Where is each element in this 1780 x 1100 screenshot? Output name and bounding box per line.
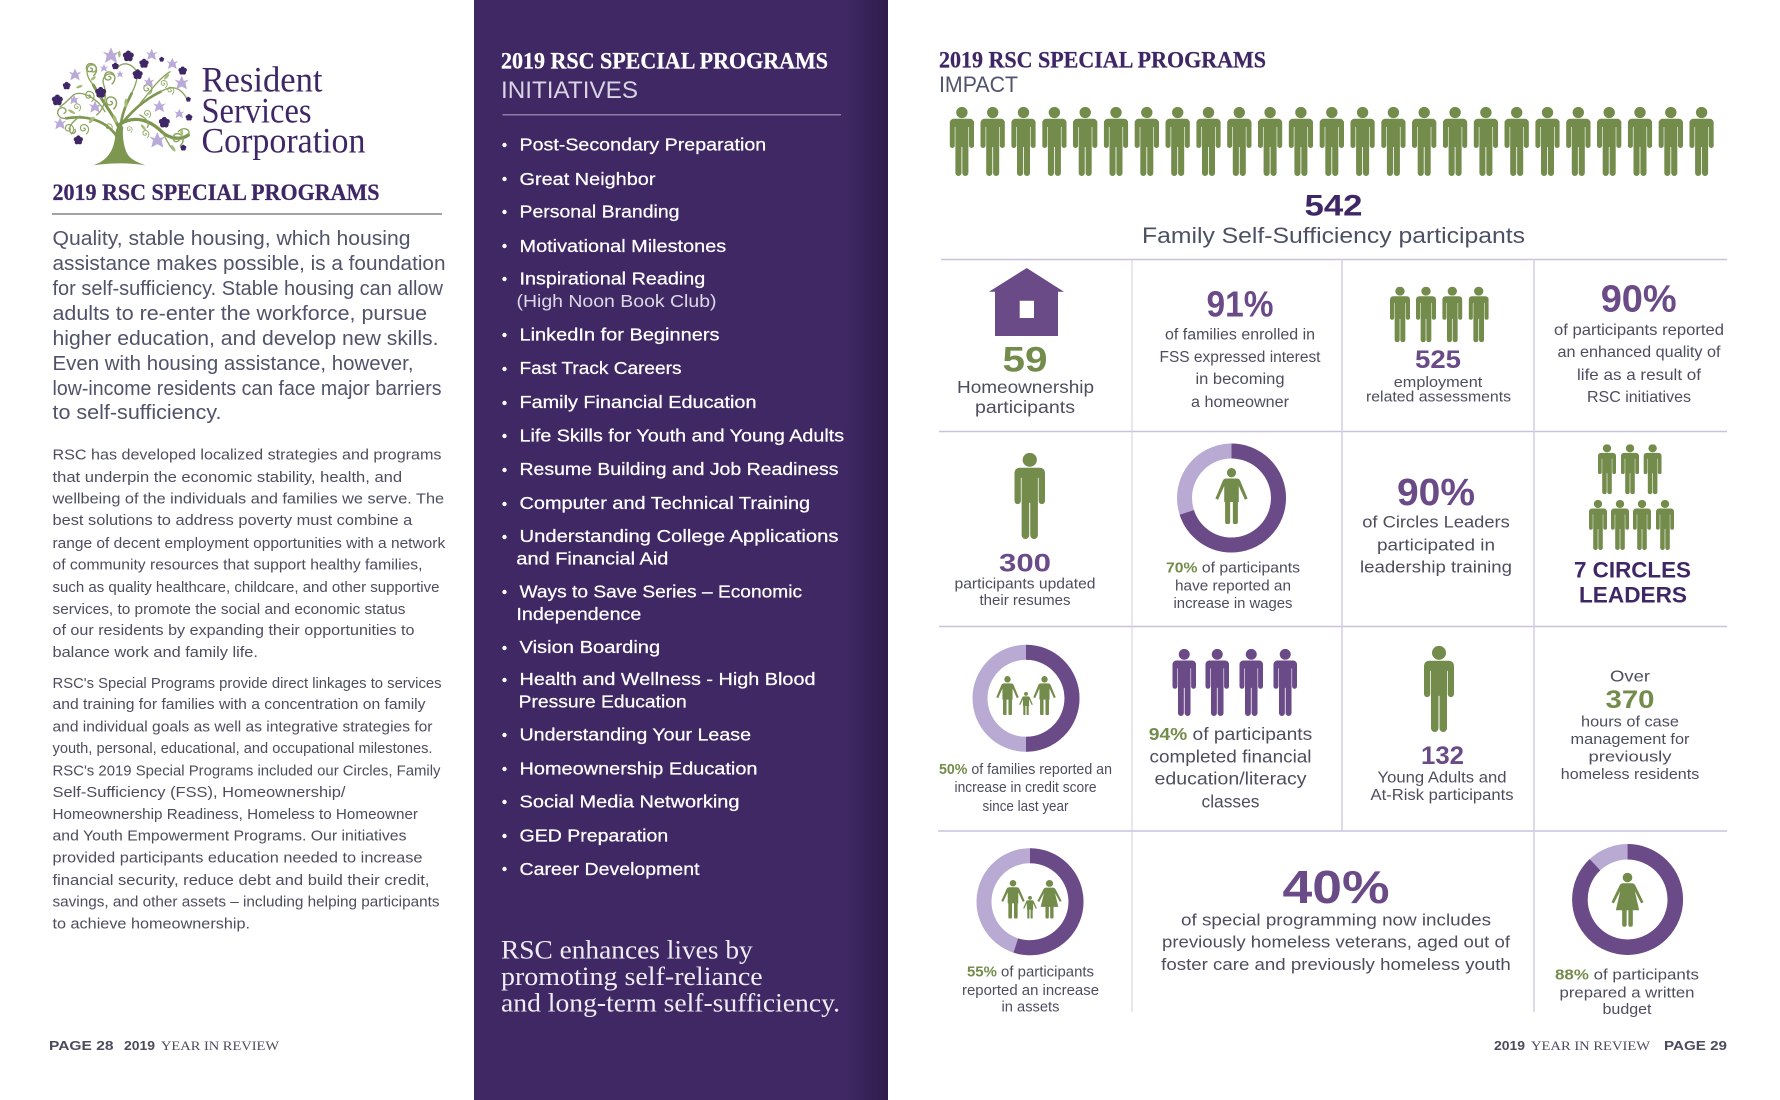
heading: initiatives bbox=[501, 48, 828, 104]
text: body paragraph two bbox=[52, 675, 442, 932]
stat: 525 assessments bbox=[1366, 287, 1511, 406]
text: body paragraph two: provided participants education needed to increase bbox=[52, 850, 422, 866]
text: body paragraph one: such as quality healthcare, childcare, and other supportive bbox=[52, 579, 440, 596]
stat: 88 percent budget: 88% of participants bbox=[1555, 966, 1699, 983]
stat: over 370 hours bbox=[1561, 669, 1699, 783]
text: closing statement: RSC enhances lives by bbox=[501, 935, 753, 964]
text: body paragraph two: and training for families with a concentration on family bbox=[52, 696, 426, 713]
stat: 70 percent wages: have reported an bbox=[1175, 579, 1291, 595]
stat: 132 young adults bbox=[1370, 646, 1514, 804]
stat: 70 percent wages bbox=[1166, 451, 1300, 612]
text: body paragraph two: youth, personal, educational, and occupational milestones. bbox=[52, 740, 432, 757]
panel: impact bbox=[938, 48, 1727, 1053]
stat: 132 young adults: 132 bbox=[1421, 742, 1464, 770]
chart: donut 50 percent bbox=[980, 652, 1072, 744]
stat: 90 percent leadership: participated in bbox=[1377, 536, 1495, 555]
stat: 88 percent budget: prepared a written bbox=[1560, 984, 1694, 1001]
stat: 90 percent quality of life: of participants reported bbox=[1554, 322, 1724, 339]
stat: 7 circles leaders bbox=[1574, 444, 1691, 608]
stat: 90 percent quality of life: RSC initiatives bbox=[1587, 389, 1691, 406]
list: initiatives: Life Skills for Youth and Young Adults bbox=[520, 425, 844, 445]
footer: page 29: YEAR IN REVIEW bbox=[1531, 1038, 1651, 1053]
stat: 88 percent budget bbox=[1555, 852, 1699, 1018]
text: body paragraph one: that underpin the economic stability, health, and bbox=[52, 469, 402, 486]
stat: 90 percent quality of life: 90% bbox=[1601, 279, 1677, 321]
stat: 90 percent leadership: of Circles Leaders bbox=[1362, 513, 1510, 532]
logo wordmark: Services bbox=[202, 90, 312, 130]
panel: left page introduction bbox=[49, 47, 446, 1053]
list: initiatives: Family Financial Education bbox=[520, 392, 756, 412]
stat: 91 percent: of families enrolled in bbox=[1165, 326, 1315, 343]
icon: house bbox=[989, 268, 1064, 336]
text: body paragraph two: RSC's 2019 Special Programs included our Circles, Family bbox=[52, 762, 441, 780]
list: initiatives: Great Neighbor bbox=[520, 169, 656, 189]
icon: person bbox=[1424, 646, 1454, 732]
text: body paragraph two: to achieve homeownership. bbox=[52, 916, 250, 932]
icon: tree bbox=[52, 47, 192, 165]
text: body paragraph two: Self-Sufficiency (FSS), Homeownership/ bbox=[52, 784, 346, 801]
icon: woman bbox=[1611, 873, 1644, 927]
stat: 94 percent financial classes: education/literacy bbox=[1154, 768, 1307, 788]
stat: 90 percent quality of life: an enhanced quality of bbox=[1558, 344, 1721, 361]
text: body paragraph one: balance work and family life. bbox=[52, 644, 258, 661]
text: lead paragraph bbox=[52, 228, 446, 424]
list: initiatives: Personal Branding bbox=[520, 202, 680, 222]
list: initiatives: and Financial Aid bbox=[516, 548, 668, 568]
stat: 542 participants: 542 bbox=[1304, 190, 1362, 223]
heading: initiatives: 2019 RSC SPECIAL PROGRAMS bbox=[501, 48, 828, 73]
stat: 90 percent leadership: 90% bbox=[1397, 472, 1475, 514]
text: lead paragraph: for self-sufficiency. Stable housing can allow bbox=[52, 278, 444, 300]
panel: initiatives bbox=[474, 0, 888, 1100]
stat: 50 percent credit score: 50% of families reported an bbox=[939, 762, 1112, 778]
stat: 90 percent leadership bbox=[1360, 472, 1512, 577]
list: initiatives: Independence bbox=[516, 604, 641, 624]
chart: donut 88 percent bbox=[1580, 852, 1675, 947]
chart: donut 70 percent bbox=[1184, 451, 1278, 545]
logo wordmark: Corporation bbox=[202, 121, 366, 161]
logo: Resident Services Corporation bbox=[52, 47, 365, 165]
stat: 91 percent: in becoming bbox=[1196, 371, 1284, 388]
footer: page 28: PAGE 28 bbox=[49, 1038, 114, 1053]
footer: page 29 bbox=[1494, 1038, 1727, 1053]
stat: 91 percent: 91% bbox=[1206, 284, 1274, 325]
text: closing statement: promoting self-reliance bbox=[501, 962, 763, 991]
stat: 59 homeownership: 59 bbox=[1002, 341, 1048, 380]
list: initiatives: Career Development bbox=[520, 859, 700, 879]
stat: 40 percent programming bbox=[1161, 861, 1511, 974]
text: body paragraph two: RSC's Special Programs provide direct linkages to services bbox=[52, 675, 442, 692]
stat: 7 circles leaders: 7 CIRCLES bbox=[1574, 558, 1691, 583]
text: body paragraph one: best solutions to address poverty must combine a bbox=[52, 512, 413, 529]
list: initiatives: Motivational Milestones bbox=[520, 236, 726, 256]
list: initiatives: Social Media Networking bbox=[520, 792, 740, 812]
stat: 300 resumes: 300 bbox=[999, 550, 1051, 578]
stat: 542 participants: Family Self-Sufficiency participants bbox=[1142, 223, 1525, 248]
stat: 88 percent budget: budget bbox=[1602, 1001, 1652, 1018]
icons: four purple people bbox=[1172, 649, 1297, 716]
stat: 59 homeownership bbox=[957, 268, 1094, 417]
list: initiatives: Computer and Technical Training bbox=[520, 493, 810, 513]
text: body paragraph two: and Youth Empowerment Programs. Our initiatives bbox=[52, 828, 406, 844]
stat: 70 percent wages: increase in wages bbox=[1174, 596, 1292, 612]
stat: 50 percent credit score: increase in credit score bbox=[954, 780, 1096, 796]
text: body paragraph one: RSC has developed localized strategies and programs bbox=[52, 446, 441, 464]
text: lead paragraph: Even with housing assistance, however, bbox=[52, 353, 414, 375]
list: initiatives: Ways to Save Series – Economic bbox=[520, 581, 802, 601]
text: closing statement: and long-term self-sufficiency. bbox=[501, 989, 840, 1018]
text: body paragraph two: savings, and other assets – including helping participants bbox=[52, 894, 440, 910]
list: initiatives: Understanding Your Lease bbox=[520, 724, 751, 744]
heading: impact: 2019 RSC SPECIAL PROGRAMS bbox=[939, 48, 1266, 72]
stat: 55 percent assets: 55% of participants bbox=[967, 965, 1094, 981]
stat: 94 percent financial classes bbox=[1149, 649, 1313, 812]
stat: 55 percent assets: in assets bbox=[1002, 1000, 1060, 1016]
list: initiatives: Vision Boarding bbox=[520, 637, 660, 657]
stat: 50 percent credit score bbox=[939, 652, 1112, 815]
list: initiatives: GED Preparation bbox=[520, 826, 668, 846]
text: lead paragraph: Quality, stable housing, which housing bbox=[52, 228, 410, 250]
text: body paragraph one: wellbeing of the individuals and families we serve. The bbox=[51, 490, 444, 508]
icon: person bbox=[1014, 453, 1045, 539]
icons: seven people bbox=[1589, 444, 1674, 550]
stat: 40 percent programming: of special programming now includes bbox=[1181, 911, 1491, 930]
list: initiatives: Fast Track Careers bbox=[520, 358, 682, 378]
list: initiatives: Resume Building and Job Readiness bbox=[520, 459, 839, 479]
text: body paragraph one bbox=[51, 446, 446, 661]
list: initiatives: Inspirational Reading bbox=[520, 269, 705, 289]
text: body paragraph one: of our residents by expanding their opportunities to bbox=[52, 622, 414, 639]
stat: 525 assessments: employment bbox=[1394, 375, 1482, 391]
text: body paragraph two: and individual goals as well as integrative strategies for bbox=[52, 718, 432, 736]
stat: 55 percent assets: reported an increase bbox=[962, 983, 1099, 999]
text: body paragraph two: Homeownership Readiness, Homeless to Homeowner bbox=[52, 806, 418, 823]
stat: 40 percent programming: previously homeless veterans, aged out of bbox=[1162, 933, 1510, 952]
text: body paragraph one: services, to promote the social and economic status bbox=[52, 601, 406, 618]
stat: 40 percent programming: 40% bbox=[1282, 861, 1390, 913]
stat: over 370 hours: previously bbox=[1588, 749, 1672, 766]
text: lead paragraph: higher education, and develop new skills. bbox=[52, 328, 438, 350]
text: lead paragraph: to self-sufficiency. bbox=[52, 402, 222, 424]
stat: 59 homeownership: participants bbox=[975, 397, 1075, 417]
stat: 7 circles leaders: LEADERS bbox=[1579, 583, 1687, 608]
heading: impact bbox=[939, 48, 1266, 97]
stat: 91 percent bbox=[1160, 284, 1321, 411]
stat: 300 resumes: participants updated bbox=[954, 575, 1096, 592]
icon row: 25 participants bbox=[950, 107, 1714, 176]
stat: over 370 hours: hours of case bbox=[1581, 714, 1679, 731]
stat: 70 percent wages: 70% of participants bbox=[1166, 561, 1300, 577]
icon: family with mother bbox=[1001, 880, 1062, 919]
stat: over 370 hours: homeless residents bbox=[1561, 766, 1699, 783]
stat: 300 resumes bbox=[954, 453, 1096, 609]
chart: donut 55 percent bbox=[984, 856, 1076, 948]
icons: four people bbox=[1390, 287, 1489, 342]
text: body paragraph one: range of decent employment opportunities with a network bbox=[52, 535, 446, 552]
stat: 50 percent credit score: since last year bbox=[982, 799, 1069, 815]
icon: person bbox=[1215, 468, 1248, 525]
stat: 90 percent quality of life: life as a result of bbox=[1577, 367, 1702, 384]
stat: 90 percent leadership: leadership training bbox=[1360, 558, 1512, 577]
text: lead paragraph: adults to re-enter the workforce, pursue bbox=[52, 303, 427, 325]
stat: 132 young adults: At-Risk participants bbox=[1370, 787, 1514, 804]
list: initiatives: Understanding College Applications bbox=[520, 526, 839, 546]
stat: 132 young adults: Young Adults and bbox=[1378, 770, 1506, 787]
list: initiatives: Post-Secondary Preparation bbox=[520, 135, 766, 155]
footer: page 29: PAGE 29 bbox=[1664, 1038, 1727, 1053]
logo wordmark bbox=[202, 60, 366, 161]
list: initiatives bbox=[502, 135, 844, 879]
stat: 59 homeownership: Homeownership bbox=[957, 377, 1094, 397]
icon: family bbox=[996, 676, 1056, 715]
list: initiatives: (High Noon Book Club) bbox=[516, 291, 716, 311]
footer: page 28 bbox=[49, 1038, 280, 1053]
footer: page 28: 2019 bbox=[124, 1038, 155, 1053]
text: lead paragraph: low-income residents can face major barriers bbox=[52, 378, 442, 400]
logo wordmark: Resident bbox=[202, 60, 322, 100]
stat: 525 assessments: 525 bbox=[1415, 346, 1461, 374]
list: initiatives: LinkedIn for Beginners bbox=[520, 324, 720, 344]
heading: initiatives: INITIATIVES bbox=[501, 77, 638, 104]
stat: 542 participants bbox=[1142, 190, 1525, 248]
text: body paragraph one: of community resources that support healthy families, bbox=[52, 556, 422, 574]
list: initiatives: Health and Wellness - High Blood bbox=[520, 669, 816, 689]
stat: 94 percent financial classes: 94% of participants bbox=[1149, 724, 1313, 744]
list: initiatives: Pressure Education bbox=[519, 692, 687, 712]
list: initiatives: Homeownership Education bbox=[520, 758, 758, 778]
stat: 90 percent quality of life bbox=[1554, 279, 1724, 406]
stat: 40 percent programming: foster care and previously homeless youth bbox=[1161, 955, 1511, 974]
text: lead paragraph: assistance makes possible, is a foundation bbox=[52, 253, 446, 275]
stat: 525 assessments: related assessments bbox=[1366, 390, 1511, 406]
footer: page 28: YEAR IN REVIEW bbox=[161, 1038, 280, 1053]
stat: over 370 hours: Over bbox=[1610, 669, 1651, 686]
text: closing statement bbox=[501, 935, 840, 1018]
text: body paragraph two: financial security, reduce debt and build their credit, bbox=[52, 872, 430, 889]
stat: 55 percent assets bbox=[962, 856, 1099, 1016]
footer: page 29: 2019 bbox=[1494, 1038, 1525, 1053]
stat: 94 percent financial classes: completed financial bbox=[1150, 747, 1312, 767]
stat: over 370 hours: 370 bbox=[1606, 686, 1654, 714]
stat: over 370 hours: management for bbox=[1570, 731, 1690, 748]
heading: impact: IMPACT bbox=[939, 72, 1018, 97]
stat: 91 percent: FSS expressed interest bbox=[1160, 349, 1321, 366]
stat: 91 percent: a homeowner bbox=[1191, 394, 1289, 411]
stat: 94 percent financial classes: classes bbox=[1202, 792, 1260, 812]
stat: 300 resumes: their resumes bbox=[980, 592, 1070, 609]
heading: 2019 RSC Special Programs: 2019 RSC SPECIAL PROGRAMS bbox=[52, 180, 380, 205]
